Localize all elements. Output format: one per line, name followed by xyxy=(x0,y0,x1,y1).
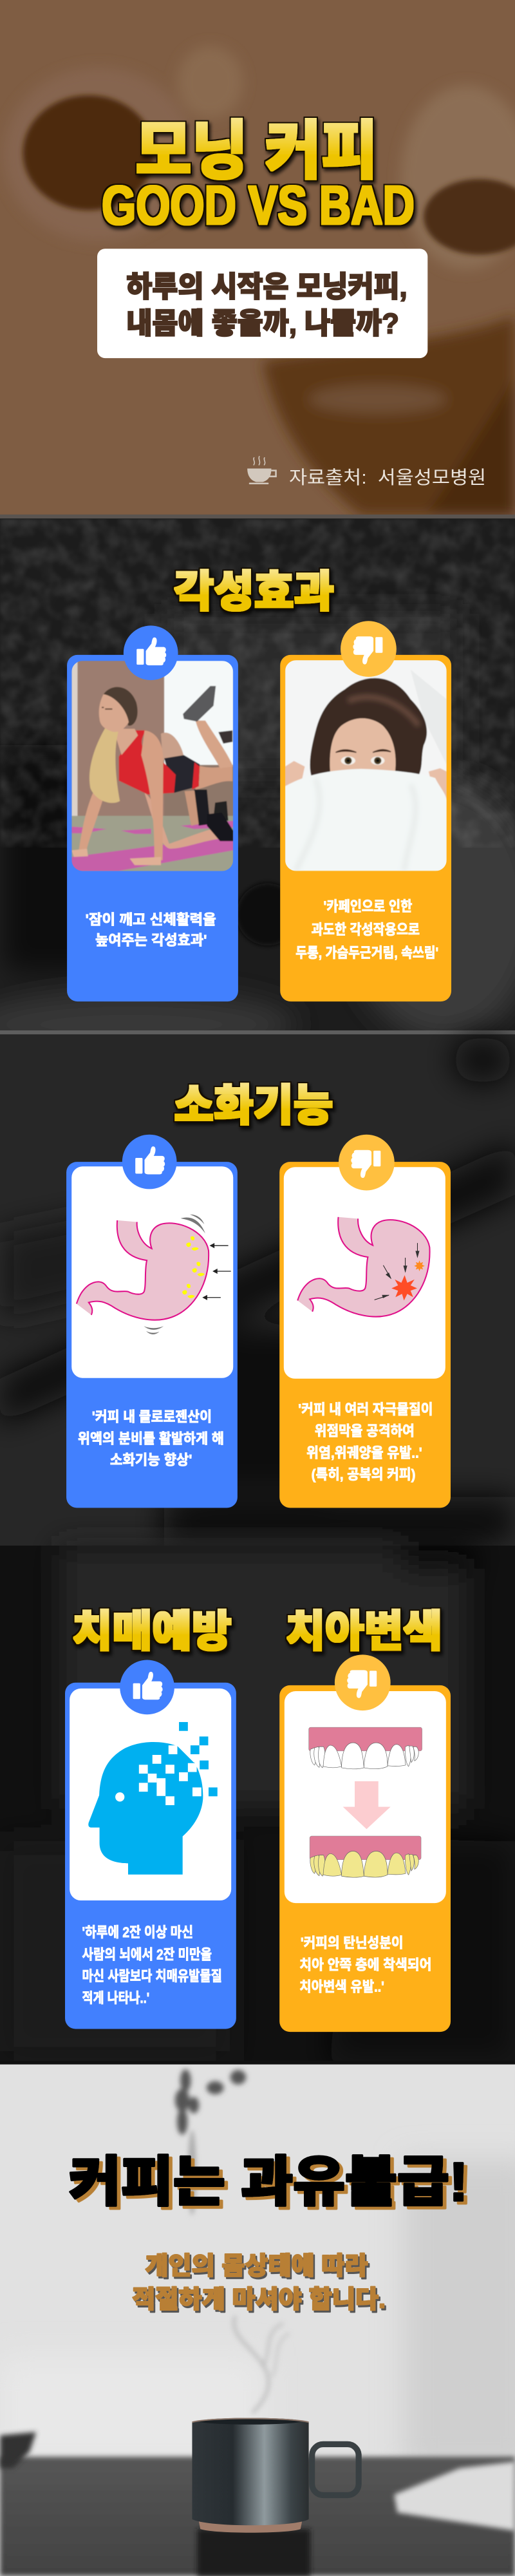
illustration: irritated stomach xyxy=(297,1217,430,1317)
icon: thumbs up xyxy=(124,625,178,680)
text: advice: 적절하게 마셔야 합니다. xyxy=(132,2286,386,2314)
card: good: 높여주는 각성효과' xyxy=(95,932,207,948)
card: good: 소화기능 향상' xyxy=(110,1452,192,1468)
icon: thumbs down xyxy=(335,1654,391,1710)
question box: 내몸에 좋을까, 나쁠까? xyxy=(126,307,399,339)
text: advice: 개인의 몸상태에 따라 xyxy=(145,2253,368,2280)
panel: closing message xyxy=(0,2061,515,2576)
icon: thumbs down xyxy=(339,1135,395,1190)
illustration: head with pixels xyxy=(88,1722,218,1875)
question box: 하루의 시작은 모닝커피, xyxy=(126,270,407,303)
card: good xyxy=(65,1660,236,2029)
card: bad: 치아변색 유발..' xyxy=(299,1978,384,1994)
text: '하루에 2잔 이상 마신 xyxy=(82,1924,193,1940)
illustration: white teeth xyxy=(309,1727,422,1769)
panel: intro header xyxy=(0,0,515,518)
question box xyxy=(97,249,427,358)
icon: coffee cup xyxy=(247,456,276,484)
card: good: 적게 나타나..' xyxy=(82,1990,149,2006)
card: good: 사람의 뇌에서 2잔 미만을 xyxy=(82,1946,212,1962)
card: bad: 위점막을 공격하여 xyxy=(315,1423,415,1439)
heading: 소화기능 xyxy=(174,1082,333,1130)
icon: thumbs up xyxy=(120,1660,174,1714)
panel: digestion section xyxy=(0,1030,515,1548)
card: good xyxy=(67,625,238,1001)
card: bad: (특히, 공복의 커피) xyxy=(312,1466,415,1482)
text: '커피 내 여러 자극물질이 xyxy=(298,1401,433,1417)
panel: alertness section xyxy=(0,515,515,1057)
subtitle: good vs bad: GOOD VS BAD xyxy=(102,175,415,236)
card: good xyxy=(66,1135,238,1508)
text: advice xyxy=(132,2253,386,2314)
heading: dementia prevention: 치매예방 xyxy=(73,1608,232,1656)
photo: woman under sheet xyxy=(285,660,447,871)
card: bad xyxy=(279,1654,451,2032)
decoration: book xyxy=(394,2461,515,2531)
illustration: coffee mug xyxy=(192,2418,359,2576)
heading: tooth discolouration: 치아변색 xyxy=(286,1608,442,1656)
source credit: 자료출처: 서울성모병원 xyxy=(289,468,486,488)
card: good: 마신 사람보다 치매유발물질 xyxy=(82,1968,222,1984)
arrow xyxy=(343,1781,391,1829)
icon: thumbs down xyxy=(341,621,397,677)
decoration: blurred plant xyxy=(175,2069,246,2215)
card: bad: 위염,위궤양을 유발..' xyxy=(306,1444,422,1461)
card: good: 위액의 분비를 활발하게 해 xyxy=(78,1430,224,1446)
illustration: healthy stomach xyxy=(77,1215,231,1334)
card: bad xyxy=(280,621,451,1001)
text: '잠이 깨고 신체활력을 xyxy=(86,912,216,928)
card: bad: 치아 안쪽 층에 착색되어 xyxy=(299,1957,431,1973)
heading: 커피는 과유불급! xyxy=(69,2152,468,2212)
card: bad: 두통, 가슴두근거림, 속쓰림' xyxy=(295,945,438,961)
photo: workout xyxy=(71,661,233,872)
title: 모닝 커피 xyxy=(135,115,378,187)
text: '카페인으로 인한 xyxy=(324,898,412,914)
text: '커피의 탄닌성분이 xyxy=(301,1935,404,1951)
decoration: steam xyxy=(234,2317,289,2412)
panel: dementia and teeth section xyxy=(0,1546,515,2063)
text: '커피 내 클로로젠산이 xyxy=(92,1409,212,1425)
card: bad: 과도한 각성작용으로 xyxy=(312,922,420,938)
card: bad xyxy=(279,1135,451,1508)
heading: 각성효과 xyxy=(174,568,334,616)
icon: thumbs up xyxy=(122,1135,176,1189)
illustration: yellow teeth xyxy=(310,1836,421,1877)
